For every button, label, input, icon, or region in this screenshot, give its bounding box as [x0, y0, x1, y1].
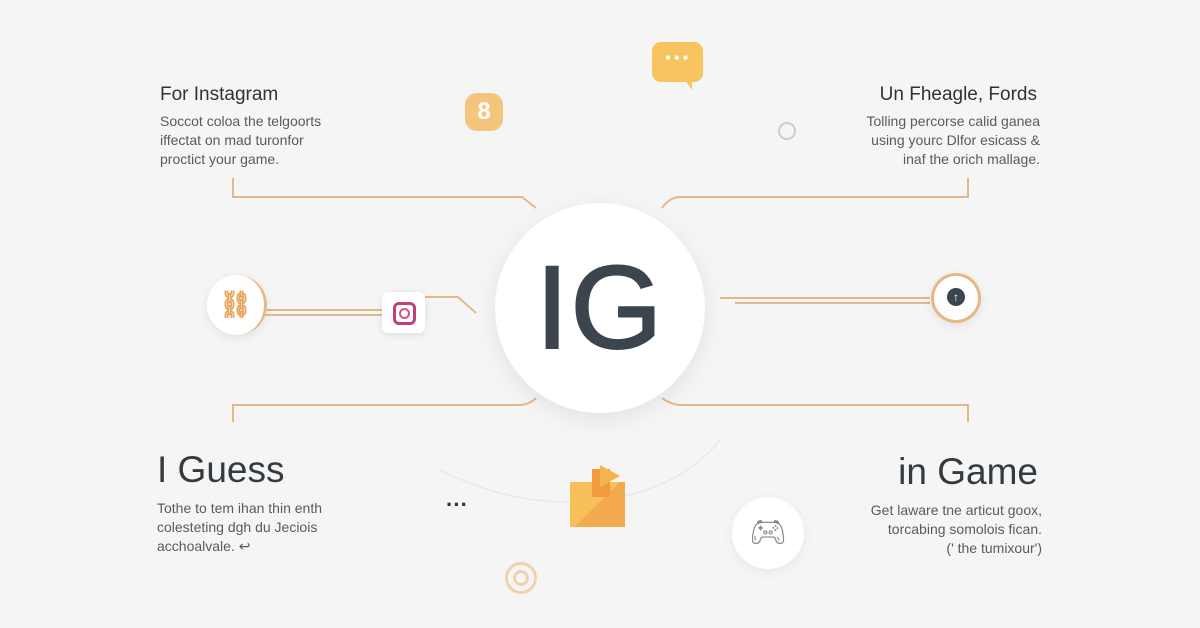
icon: chat bubble: ··· — [664, 42, 690, 72]
icon: gamepad: 🎮︎ — [749, 516, 787, 549]
icon: instagram — [382, 292, 425, 333]
text: bottom right: (' the tumixour') — [946, 540, 1042, 556]
icon: hex badge: 8 — [477, 98, 491, 125]
text: bottom left: I Guess — [157, 449, 284, 490]
icon: hex badge — [465, 93, 503, 131]
text: bottom right: Get laware tne articut goox, — [871, 502, 1042, 518]
icon: link bubble: ⛓ — [219, 289, 252, 319]
text: top left: iffectat on mad turonfor — [160, 132, 304, 148]
text: bottom right: torcabing somolois fican. — [888, 521, 1042, 537]
text: top right: Un Fheagle, Fords — [880, 84, 1037, 105]
text: bottom right — [871, 451, 1042, 556]
text: top right — [866, 84, 1040, 167]
text: bottom left — [157, 449, 322, 554]
text: top left: For Instagram — [160, 84, 278, 105]
icon: small circle — [778, 122, 796, 140]
icon: link bubble — [207, 275, 267, 335]
text: top left: Soccot coloa the telgoorts — [160, 113, 321, 129]
text: bottom right: in Game — [898, 451, 1038, 492]
icon: pin: ↑ — [953, 290, 959, 304]
center circle: IG — [536, 242, 664, 374]
center circle — [495, 203, 705, 413]
text: top right: Tolling percorse calid ganea — [866, 113, 1040, 129]
icon: pin — [931, 273, 981, 323]
icon: gamepad — [732, 497, 804, 569]
text: top left — [160, 84, 321, 167]
icon: folder share — [570, 465, 625, 527]
text: bottom left: colesteting dgh du Jeciois — [157, 519, 317, 535]
icon: dots: ··· — [446, 492, 468, 517]
text: bottom left: Tothe to tem ihan thin enth — [157, 500, 322, 516]
icon: target — [505, 562, 537, 594]
text: bottom left: acchoalvale. ↩ — [157, 538, 250, 554]
icon: chat bubble — [652, 42, 703, 82]
text: top right: inaf the orich mallage. — [903, 151, 1040, 167]
text: top left: proctict your game. — [160, 151, 279, 167]
text: top right: using yourc Dlfor esicass & — [871, 132, 1040, 148]
